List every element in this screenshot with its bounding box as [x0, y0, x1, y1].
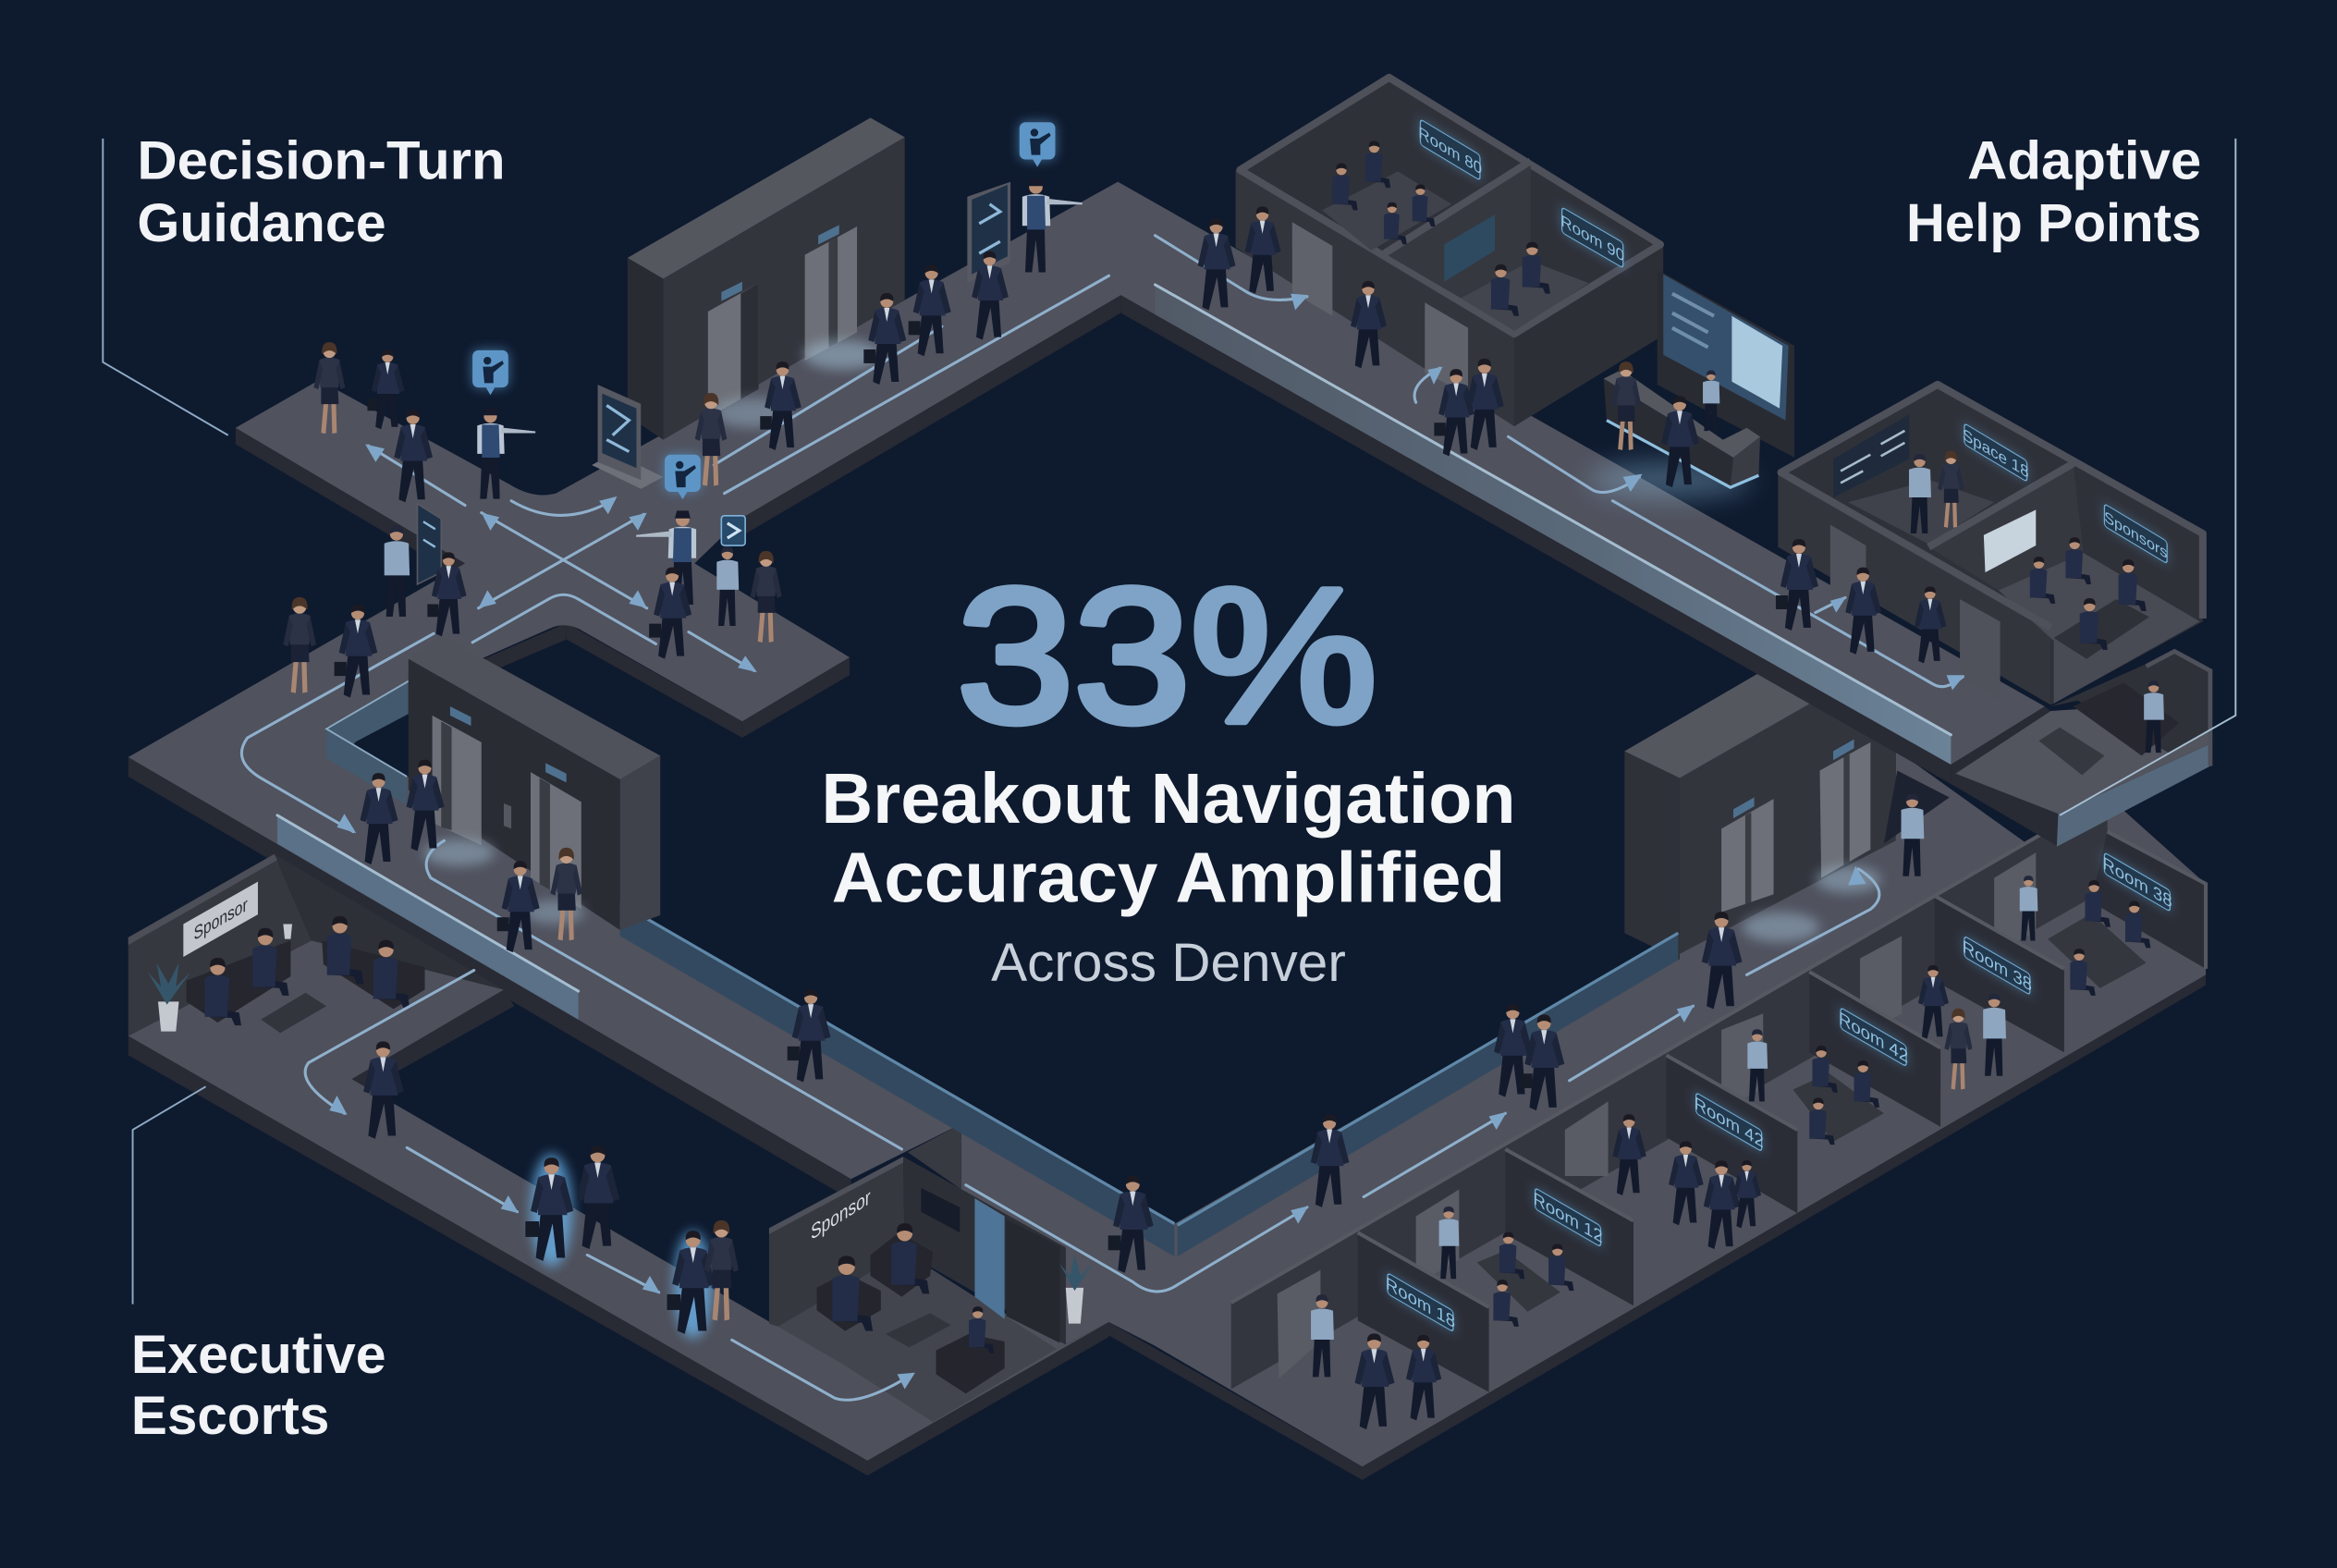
- people: executive escorts: [363, 1041, 739, 1334]
- exec glow: [531, 1154, 713, 1339]
- wayfinding sign: crossroads small: [721, 516, 745, 545]
- rooms wall top rims: [1231, 796, 2206, 1307]
- glass rail around opening: [326, 681, 410, 805]
- guide arrowheads: [329, 294, 1964, 1390]
- heading: Decision-Turn Guidance: Guidance: [137, 193, 386, 253]
- title: Breakout Navigation: [821, 759, 1516, 839]
- elevator block: top: [628, 117, 905, 440]
- icon: plant: [148, 962, 190, 1032]
- sofas and table in lounge: [187, 925, 425, 1033]
- seated people Room 90: [1491, 242, 1550, 316]
- sign: Room 90: Room 90: [1560, 211, 1624, 265]
- walkway guide lines: [241, 236, 1963, 1400]
- panel: sponsor lounge walls: [128, 854, 504, 1035]
- glass rail mid corridor: [620, 903, 1174, 1256]
- doors on rooms back wall: [1278, 852, 2036, 1378]
- big stat: 33%: [957, 548, 1377, 762]
- subtitle: Across Denver: [991, 933, 1346, 993]
- help desk wall and screen: [1658, 270, 1794, 458]
- people: lower rooms: [1311, 876, 2150, 1429]
- floor side bands: [128, 295, 2206, 1480]
- seated people Sponsors room: [2030, 537, 2149, 659]
- sign: sponsor lounge: Sponsor: [194, 893, 248, 945]
- leader line: Executive Escorts: [133, 1086, 206, 1305]
- wayfinding sign: top left: [592, 385, 663, 489]
- people: north-west arm and crossroads: [283, 342, 782, 697]
- panel: lower-left corridor and sponsor lounge floor: [128, 940, 1109, 1461]
- elevator block: lower right: [1624, 672, 1950, 960]
- heading: Decision-Turn Guidance: Decision-Turn: [137, 130, 506, 190]
- sign: sponsor room two: Sponsor: [811, 1185, 871, 1245]
- sign: Space 18: Space 18: [1963, 424, 2028, 482]
- heading: Executive Escorts: [131, 1325, 386, 1446]
- room block: Space 18 and Sponsors: [1778, 385, 2203, 705]
- partition walls: [1358, 832, 2206, 1392]
- elevator block: mid: [409, 635, 660, 930]
- sign: Room 38 second: Room 38: [2102, 853, 2172, 913]
- right corridor light strip: [1155, 285, 1951, 765]
- wayfinding sign: crossroads pillar: [417, 504, 441, 584]
- people: north-east corridor: [695, 178, 1083, 486]
- title: Accuracy Amplified: [832, 838, 1505, 917]
- sign: Room 42: Room 42: [1695, 1094, 1764, 1152]
- right corridor side band: [1120, 295, 1951, 784]
- icon: help point top: [1020, 122, 1055, 167]
- leader line: Decision-Turn Guidance: [103, 139, 228, 435]
- leader line: Adaptive Help Points: [2060, 139, 2235, 815]
- glass rail south-east corridor: [1178, 933, 1678, 1256]
- panel: upper-right lounge: [1951, 652, 2210, 847]
- sign: Room 18: Room 18: [1386, 1274, 1455, 1333]
- people: right corridor: [1198, 206, 1964, 663]
- sign: Room 38: Room 38: [1963, 937, 2032, 996]
- heading: Decision-Turn Guidance: [137, 130, 506, 253]
- room signs: [1386, 851, 2172, 1333]
- panel: lower rooms floor: [1155, 796, 2206, 1466]
- people: south-east corridor: [1311, 794, 1924, 1207]
- sign: Room 12: Room 12: [1533, 1189, 1603, 1248]
- room block: Room 80 and Room 90: [1236, 78, 1663, 426]
- wayfinding sign: top: [967, 182, 1010, 283]
- heading: Adaptive Help Points: Adaptive: [1967, 130, 2201, 190]
- mid corridor light strip: [277, 815, 579, 1020]
- seated people Room 80: [1332, 141, 1435, 244]
- heading: Adaptive Help Points: [1906, 130, 2201, 253]
- people: mid corridor: [361, 760, 1154, 1273]
- title: [821, 759, 1516, 917]
- heading: Executive Escorts: Escorts: [131, 1386, 329, 1446]
- help desk counter: [1587, 370, 1760, 497]
- icon: help point centre: [665, 455, 701, 499]
- sign: Room 80: Room 80: [1418, 122, 1482, 178]
- icon: help point NW: [472, 350, 508, 395]
- panel: south-east corridor floor: [620, 750, 2027, 1390]
- panel: upper corridors and crossroads floor: [128, 182, 2045, 1179]
- lounge people seated: [205, 916, 410, 1025]
- sign: Sponsors: Sponsors: [2104, 508, 2168, 562]
- sign: sponsor lounge: [183, 882, 258, 957]
- meeting tables: [1477, 913, 2147, 1312]
- sign: Room 42 second: Room 42: [1839, 1009, 1908, 1068]
- heading: Executive Escorts: Executive: [131, 1325, 386, 1385]
- heading: Adaptive Help Points: Help Points: [1906, 193, 2201, 253]
- panel: sponsor room two: [769, 1124, 1093, 1422]
- rooms back wall: [1231, 796, 2108, 1390]
